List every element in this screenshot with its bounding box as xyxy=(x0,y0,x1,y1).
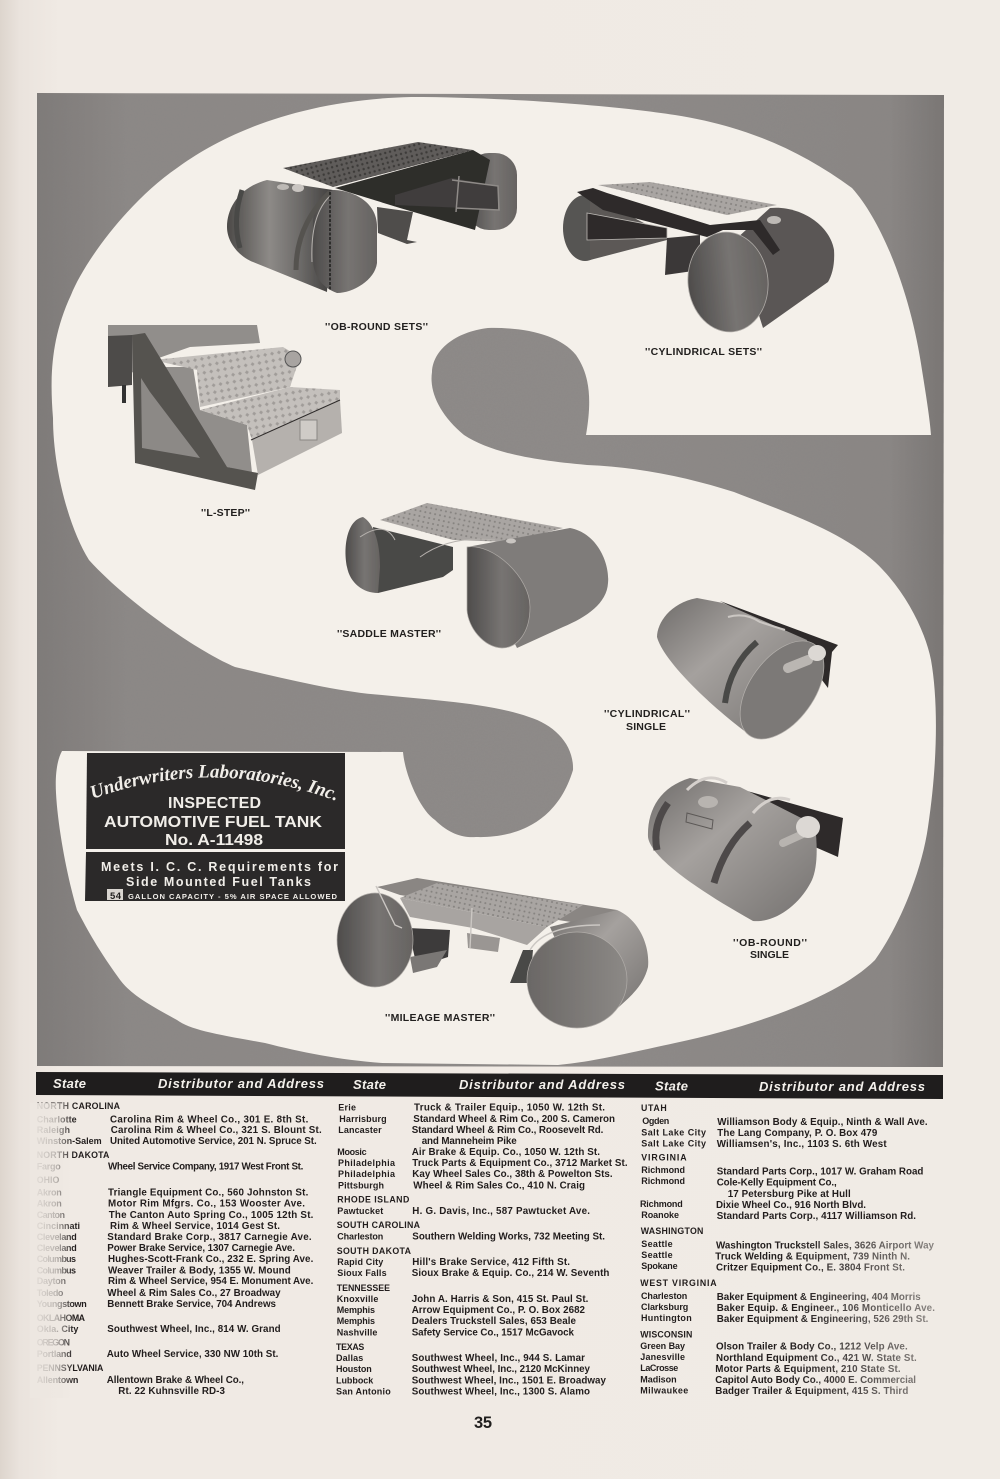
distributor list: column 2: RHODE ISLAND xyxy=(337,1194,409,1204)
caption: saddle master: ''SADDLE MASTER'' xyxy=(337,628,441,640)
certification label: underwriters laboratories: Underwriters Laboratories, Inc. xyxy=(90,764,336,800)
tank: l-step xyxy=(108,325,342,490)
table header bar: State xyxy=(655,1078,688,1094)
distributor list: column 3: Huntington xyxy=(641,1313,692,1323)
distributor list: column 1: Cleveland xyxy=(37,1232,77,1242)
distributor list: column 2: Wheel & Rim Sales Co., 410 N. Craig xyxy=(413,1180,585,1192)
distributor list: column 3: Truck Welding & Equipment, 739 Ninth N. xyxy=(715,1252,910,1262)
distributor list: column 1: NORTH CAROLINA xyxy=(37,1101,121,1111)
distributor list: column 3: Williamsen's, Inc., 1103 S. 6th West xyxy=(717,1139,887,1150)
distributor list: column 2: SOUTH DAKOTA xyxy=(337,1246,412,1256)
distributor list: column 1: Portland xyxy=(37,1349,72,1359)
distributor list: column 1: Canton xyxy=(37,1210,65,1220)
distributor list: column 1: Auto Wheel Service, 330 NW 10th St. xyxy=(107,1349,279,1360)
distributor list: column 3: Green Bay xyxy=(640,1341,685,1351)
distributor list: column 2: Erie xyxy=(338,1102,356,1112)
certification label: underwriters laboratories xyxy=(85,753,345,902)
distributor list: column 2: Pittsburgh xyxy=(338,1180,384,1190)
distributor list: column 1: Raleigh xyxy=(37,1125,70,1135)
caption: ob-round single xyxy=(733,937,807,961)
distributor list: column 3: Charleston xyxy=(641,1291,687,1301)
distributor list: column 3: Critzer Equipment Co., E. 3804 Front St. xyxy=(716,1262,905,1274)
distributor list: column 1: Akron xyxy=(37,1198,62,1208)
distributor list: column 3: Baker Equipment & Engineering, 404 Morris xyxy=(717,1292,921,1303)
distributor list: column 2: Knoxville xyxy=(337,1294,378,1304)
distributor list: column 1: Wheel & Rim Sales Co., 27 Broadway xyxy=(107,1288,281,1299)
distributor list: column 2: John A. Harris & Son, 415 St. Paul St. xyxy=(412,1294,589,1305)
distributor list: column 3: Badger Trailer & Equipment, 415 S. Third xyxy=(715,1386,908,1397)
distributor list: column 2: Standard Wheel & Rim Co., Roosevelt Rd. xyxy=(412,1125,604,1136)
distributor list: column 1: Power Brake Service, 1307 Carnegie Ave. xyxy=(107,1243,295,1254)
caption: ob-round sets: ''OB-ROUND SETS'' xyxy=(325,321,428,333)
distributor list: column 3 xyxy=(640,1103,935,1397)
distributor list: column 2: Harrisburg xyxy=(339,1114,387,1124)
distributor list: column 1: Hughes-Scott-Frank Co., 232 E. Spring Ave. xyxy=(108,1254,314,1265)
distributor list: column 1: Columbus xyxy=(37,1266,76,1276)
distributor list: column 2: TEXAS xyxy=(336,1342,364,1352)
distributor list: column 1: Standard Brake Corp., 3817 Carnegie Ave. xyxy=(107,1232,312,1243)
distributor list: column 3: Baker Equip. & Engineer., 106 Monticello Ave. xyxy=(717,1303,935,1314)
distributor list: column 1: Cleveland xyxy=(37,1243,77,1253)
distributor list: column 1 xyxy=(37,1101,322,1397)
distributor list: column 3: Richmond xyxy=(641,1165,685,1175)
distributor list: column 3: Salt Lake City xyxy=(641,1128,706,1138)
panel: grey background with white S shape xyxy=(37,93,944,1067)
table header bar: Distributor and Address xyxy=(759,1079,925,1094)
distributor list: column 3: Olson Trailer & Body Co., 1212 Velp Ave. xyxy=(716,1342,908,1352)
distributor list: column 3: Richmond xyxy=(640,1199,683,1209)
tank: ob-round sets xyxy=(227,142,517,293)
distributor list: column 2: Dallas xyxy=(336,1353,363,1363)
distributor list: column 3: Dixie Wheel Co., 916 North Blvd. xyxy=(716,1200,866,1211)
caption: cylindrical sets: ''CYLINDRICAL SETS'' xyxy=(645,346,762,358)
distributor list: column 1: Rt. 22 Kuhnsville RD-3 xyxy=(118,1386,226,1397)
table header bar: Distributor and Address xyxy=(158,1076,324,1091)
distributor list: column 2: and Manneheim Pike xyxy=(422,1136,517,1147)
distributor list: column 1: Wheel Service Company, 1917 West Front St. xyxy=(108,1162,304,1172)
distributor list: column 1: Carolina Rim & Wheel Co., 321 S. Blount St. xyxy=(111,1125,322,1136)
distributor list: column 2: Sioux Falls xyxy=(337,1268,387,1278)
distributor list: column 2: Sioux Brake & Equip. Co., 214 W. Seventh xyxy=(412,1268,609,1279)
distributor list: column 1: Southwest Wheel, Inc., 814 W. Grand xyxy=(107,1324,281,1335)
distributor list: column 1: Charlotte xyxy=(37,1114,77,1124)
distributor list: column 1: Okla. City xyxy=(37,1324,78,1334)
inspected text: INSPECTED xyxy=(168,795,261,812)
distributor list: column 2: Memphis xyxy=(337,1316,375,1326)
distributor list: column 1: Weaver Trailer & Body, 1355 W. Mound xyxy=(108,1266,291,1276)
distributor list: column 3: Richmond xyxy=(641,1176,685,1186)
table header bar: State xyxy=(53,1076,86,1091)
distributor list: column 2: Southwest Wheel, Inc., 1300 S. Alamo xyxy=(412,1386,590,1398)
distributor list: column 3: Madison xyxy=(640,1374,677,1384)
distributor list: column 3: Ogden xyxy=(642,1116,669,1126)
requirements text: Meets I. C. C. Requirements for xyxy=(101,860,338,874)
distributor list: column 3: Cole-Kelly Equipment Co., xyxy=(717,1178,837,1188)
caption: cylindrical single: ''CYLINDRICAL'' xyxy=(604,708,690,720)
distributor list: column 1: OHIO xyxy=(37,1175,60,1185)
distributor list: column 2: Philadelphia xyxy=(338,1169,396,1179)
distributor list: column 2: San Antonio xyxy=(336,1386,391,1396)
distributor list: column 1: OKLAHOMA xyxy=(37,1313,86,1323)
distributor list: column 2: Truck & Trailer Equip., 1050 W. 12th St. xyxy=(414,1102,605,1114)
distributor list: column 2: Lubbock xyxy=(336,1376,374,1386)
distributor list: column 3: Washington Truckstell Sales, 3626 Airport Way xyxy=(716,1240,935,1252)
distributor list: column 1: Triangle Equipment Co., 560 Johnston St. xyxy=(108,1188,309,1198)
certification label: underwriters laboratories: GALLON CAPACITY - 5% AIR SPACE ALLOWED xyxy=(128,892,338,901)
arched blackletter heading xyxy=(90,777,339,802)
distributor list: column 1: The Canton Auto Spring Co., 1005 12th St. xyxy=(109,1210,314,1221)
distributor list: column 3: The Lang Company, P. O. Box 479 xyxy=(717,1128,878,1139)
distributor list: column 1: Columbus xyxy=(37,1254,76,1264)
distributor list: column 2: SOUTH CAROLINA xyxy=(337,1220,421,1230)
certification label: underwriters laboratories: 54 xyxy=(110,891,122,902)
distributor list: column 2: Philadelphia xyxy=(338,1158,396,1168)
distributor list: column 1: Cincinnati xyxy=(37,1221,80,1231)
certification label: underwriters laboratories: AUTOMOTIVE FUEL TANK xyxy=(104,814,322,831)
distributor list: column 2: Memphis xyxy=(337,1305,375,1315)
distributor list: column 3: Standard Parts Corp., 1017 W. Graham Road xyxy=(717,1166,923,1178)
distributor list: column 3: Motor Parts & Equipment, 210 State St. xyxy=(715,1364,901,1375)
distributor list: column 3: Spokane xyxy=(641,1261,678,1271)
distributor list: column 2 xyxy=(336,1102,628,1398)
distributor list: column 2: Moosic xyxy=(337,1147,367,1157)
distributor list: column 3: Janesville xyxy=(640,1352,685,1362)
distributor list: column 2: Lancaster xyxy=(338,1125,382,1135)
caption: mileage master: ''MILEAGE MASTER'' xyxy=(385,1012,495,1024)
distributor list: column 1: NORTH DAKOTA xyxy=(37,1150,110,1160)
distributor list: column 1: OREGON xyxy=(37,1338,70,1348)
distributor list: column 3: Clarksburg xyxy=(641,1302,688,1312)
distributor list: column 2: Standard Wheel & Rim Co., 200 S. Cameron xyxy=(413,1114,615,1125)
distributor list: column 3: Baker Equipment & Engineering, 526 29th St. xyxy=(717,1314,929,1325)
distributor list: column 2: Arrow Equipment Co., P. O. Box 2682 xyxy=(412,1305,586,1316)
distributor list: column 2: Houston xyxy=(336,1364,372,1374)
distributor list: column 1: Carolina Rim & Wheel Co., 301 E. 8th St. xyxy=(110,1114,309,1126)
distributor list: column 3: Seattle xyxy=(641,1239,673,1249)
caption: ob-round single: ''OB-ROUND'' xyxy=(733,937,807,949)
caption: cylindrical single xyxy=(604,708,690,733)
tank: ob-round single xyxy=(648,778,843,921)
distributor list: column 3: VIRGINIA xyxy=(641,1152,687,1162)
page number: 35 xyxy=(474,1414,492,1432)
caption: ob-round single: SINGLE xyxy=(750,949,789,961)
distributor list: column 1: Toledo xyxy=(37,1288,64,1298)
distributor list: column 3: UTAH xyxy=(641,1103,667,1113)
distributor list: column 3: Northland Equipment Co., 421 W. State St. xyxy=(716,1353,917,1364)
distributor list: column 2: Hill's Brake Service, 412 Fifth St. xyxy=(412,1257,570,1268)
distributor list: column 1: Youngstown xyxy=(37,1299,87,1309)
distributor list: column 2: Safety Service Co., 1517 McGavock xyxy=(412,1328,575,1338)
tank: cylindrical sets xyxy=(563,182,834,336)
distributor list: column 3: Capitol Auto Body Co., 4000 E. Commercial xyxy=(715,1375,916,1386)
tank: mileage master xyxy=(337,878,648,1028)
distributor list: column 2: Pawtucket xyxy=(337,1206,383,1216)
tank: cylindrical single xyxy=(657,598,841,754)
distributor list: column 1: Winston-Salem xyxy=(37,1136,102,1146)
distributor list: column 1: Allentown xyxy=(37,1375,78,1385)
distributor list: column 3: 17 Petersburg Pike at Hull xyxy=(728,1189,851,1200)
capacity badge xyxy=(107,889,123,900)
table header bar: State xyxy=(353,1077,386,1092)
distributor list: column 3: Seattle xyxy=(641,1250,673,1260)
distributor list: column 3: WISCONSIN xyxy=(640,1330,692,1340)
distributor list: column 1: Bennett Brake Service, 704 Andrews xyxy=(107,1299,277,1310)
distributor list: column 2: Air Brake & Equip. Co., 1050 W. 12th St. xyxy=(412,1147,600,1158)
distributor list: column 1: Rim & Wheel Service, 1014 Gest St. xyxy=(110,1221,280,1232)
distributor list: column 2: H. G. Davis, Inc., 587 Pawtucket Ave. xyxy=(412,1206,590,1217)
caption: l-step: ''L-STEP'' xyxy=(201,507,250,519)
distributor list: column 1: Allentown Brake & Wheel Co., xyxy=(107,1375,244,1386)
distributor list: column 2: Charleston xyxy=(337,1232,383,1242)
distributor list: column 3: Roanoke xyxy=(641,1210,679,1220)
distributor list: column 3: LaCrosse xyxy=(640,1363,678,1373)
distributor list: column 1: PENNSYLVANIA xyxy=(37,1363,104,1373)
distributor list: column 1: United Automotive Service, 201 N. Spruce St. xyxy=(110,1136,317,1147)
distributor list: column 2: Truck Parts & Equipment Co., 3712 Market St. xyxy=(412,1158,628,1169)
distributor list: column 2: Southwest Wheel, Inc., 1501 E. Broadway xyxy=(412,1376,607,1386)
distributor list: column 2: Southwest Wheel, Inc., 2120 McKinney xyxy=(412,1364,591,1375)
caption: cylindrical single: SINGLE xyxy=(626,721,666,733)
distributor list: column 2: Kay Wheel Sales Co., 38th & Powelton Sts. xyxy=(412,1169,613,1180)
distributor list: column 2: Southern Welding Works, 732 Meeting St. xyxy=(412,1232,605,1242)
tank: saddle master xyxy=(346,503,608,648)
certification label: underwriters laboratories: No. A-11498 xyxy=(165,832,263,849)
distributor list: column 2: Dealers Truckstell Sales, 653 Beale xyxy=(412,1316,577,1327)
distributor list: column 3: Salt Lake City xyxy=(641,1138,706,1148)
distributor list: column 2: Nashville xyxy=(337,1328,377,1338)
distributor list: column 1: Akron xyxy=(37,1188,62,1198)
table header bar: Distributor and Address xyxy=(459,1077,625,1092)
distributor list: column 1: Motor Rim Mfgrs. Co., 153 Wooster Ave. xyxy=(108,1198,305,1210)
distributor list: column 1: Dayton xyxy=(37,1276,66,1286)
table header bar xyxy=(36,1072,943,1099)
distributor list: column 2: Southwest Wheel, Inc., 944 S. Lamar xyxy=(412,1353,585,1364)
distributor list: column 2: TENNESSEE xyxy=(337,1283,390,1293)
distributor list: column 1: Rim & Wheel Service, 954 E. Monument Ave. xyxy=(108,1276,314,1287)
certification label: underwriters laboratories: Side Mounted Fuel Tanks xyxy=(126,875,311,889)
distributor list: column 3: WASHINGTON xyxy=(641,1226,703,1236)
distributor list: column 3: Milwaukee xyxy=(640,1386,688,1396)
distributor list: column 3: WEST VIRGINIA xyxy=(640,1278,717,1288)
distributor list: column 3: Williamson Body & Equip., Ninth & Wall Ave. xyxy=(717,1117,928,1128)
distributor list: column 2: Rapid City xyxy=(337,1257,383,1267)
distributor list: column 1: Fargo xyxy=(37,1162,61,1172)
distributor list: column 3: Standard Parts Corp., 4117 Williamson Rd. xyxy=(717,1211,916,1222)
big white letter S xyxy=(52,97,936,1065)
